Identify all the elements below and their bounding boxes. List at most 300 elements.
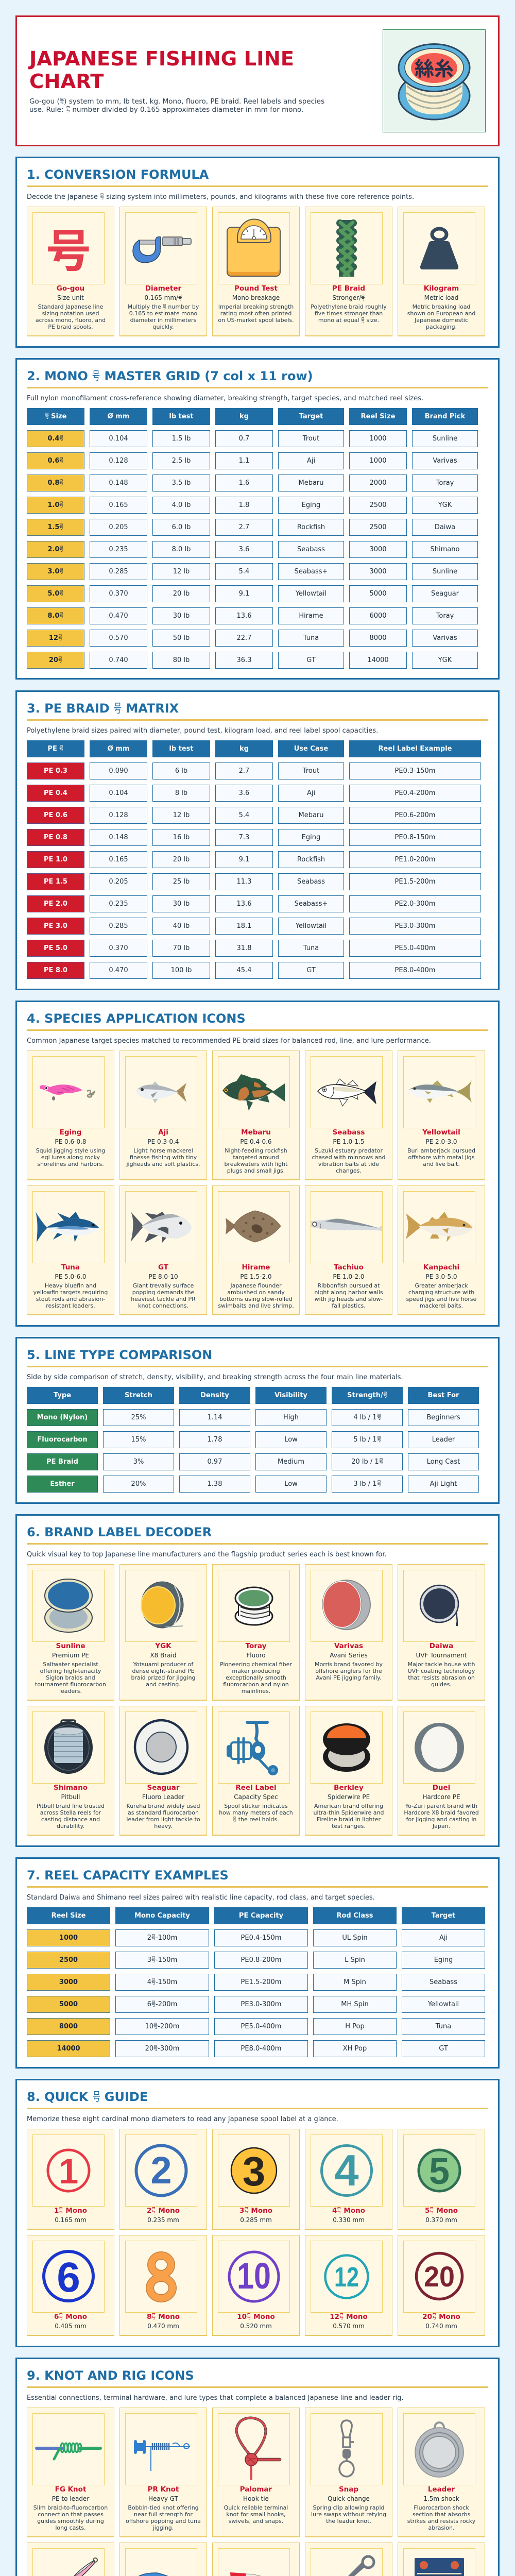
header row: Strength/ — [347, 1392, 383, 1399]
icon: braid — [311, 212, 383, 284]
icon: GT fish — [125, 1191, 197, 1263]
card: Rod Tip — [305, 2543, 392, 2576]
row: PE 0.4: 0.104 — [109, 789, 128, 797]
note: offering high-tenacity — [40, 1668, 101, 1674]
row: PE 0.8 — [27, 829, 481, 846]
heading: 2. MONO MASTER GRID (7 col x 11 row) — [27, 369, 313, 383]
header row: 号 — [383, 1389, 387, 1399]
row: fluorocarbon: 5 lb / 1 — [353, 1436, 377, 1444]
icon: daiwa spool — [403, 1570, 475, 1642]
row: 5000: MH Spin — [341, 2001, 369, 2008]
table: mono grid — [27, 408, 478, 669]
value: PE 1.0-2.0 — [333, 1273, 365, 1280]
note: Squid jigging style using — [36, 1147, 105, 1154]
name: Shimano — [54, 1784, 88, 1792]
icon: metal jig — [32, 2548, 105, 2576]
note: how many meters of each — [219, 1809, 293, 1816]
card: PE Braid — [305, 207, 392, 336]
row: PE 2.0: 30 lb — [173, 900, 190, 908]
icon: micrometer — [125, 212, 197, 284]
note: with jig heads and slow- — [315, 1296, 383, 1302]
icon: number 5: 5 — [429, 2151, 450, 2192]
note — [120, 1147, 207, 1167]
note: Avani PE jigging family. — [316, 1674, 382, 1681]
value: Size unit — [57, 294, 84, 301]
row: 1.5 — [27, 519, 478, 536]
note: exceptionally smooth — [226, 1674, 286, 1681]
card grid — [27, 2408, 485, 2576]
title: CHART — [29, 70, 104, 93]
name: Eging — [60, 1128, 81, 1137]
icon: seabass fish — [311, 1056, 383, 1128]
note — [128, 302, 199, 330]
note: tournament fluorocarbon — [35, 1681, 106, 1688]
row: 14000: PE8.0-400m — [241, 2045, 281, 2053]
note: Morris brand favored by — [315, 1661, 383, 1668]
name — [27, 2207, 114, 2215]
row: PE 0.8: PE0.8-150m — [395, 834, 435, 841]
name — [213, 2207, 299, 2215]
note: stout rods and abrasion- — [36, 1296, 105, 1302]
note — [120, 1661, 207, 1688]
note — [398, 1147, 485, 1167]
icon: ribbonfish — [311, 1191, 383, 1263]
note — [213, 1803, 299, 1823]
note: Polyethylene braid roughly — [311, 303, 387, 310]
row: 3.0: 号 — [59, 566, 64, 575]
card: Mebaru — [212, 1050, 300, 1180]
name: Reel Label — [235, 1784, 277, 1792]
icon: number 1 — [32, 2134, 105, 2207]
row: 0.6: 1000 — [369, 457, 387, 465]
name: 20 Mono — [422, 2313, 460, 2321]
row: PE 0.8: PE 0.8 — [44, 834, 67, 841]
card: Tuna — [27, 1185, 114, 1315]
icon: rod tip guide — [311, 2548, 383, 2576]
note — [305, 1803, 392, 1829]
row: 12: 12 — [49, 634, 58, 642]
heading: 3. PE BRAID MATRIX — [27, 701, 179, 716]
heading: 4. SPECIES APPLICATION ICONS — [27, 1011, 246, 1026]
value: Stronger/ — [332, 294, 361, 301]
row: 3000: PE1.5-200m — [241, 1978, 281, 1986]
value: Avani Series — [330, 1652, 368, 1659]
icon: number 4: 4 — [334, 2146, 359, 2195]
row: 2500: Eging — [434, 1956, 453, 1964]
note: 号 — [361, 316, 365, 324]
heading: 号 — [114, 698, 122, 716]
row: PE 3.0: 0.285 — [109, 922, 128, 930]
row: 20 — [27, 652, 478, 669]
row: 3000: 3000 — [59, 1978, 78, 1986]
value: PE 0.4-0.6 — [240, 1138, 272, 1145]
row: 8000: PE5.0-400m — [241, 2023, 281, 2030]
note: and casting. — [146, 1681, 181, 1688]
row: 8000: 10 -200m — [145, 2023, 179, 2030]
header row: kg — [239, 413, 249, 420]
note: heavy. — [154, 1823, 173, 1829]
row: 20: 80 lb — [173, 656, 190, 664]
row: PE 0.4: 8 lb — [175, 789, 187, 797]
note: plugs and small jigs. — [227, 1167, 285, 1174]
row: 12: 22.7 — [237, 634, 251, 642]
row: fluorocarbon: 1.78 — [208, 1436, 222, 1444]
row: PE braid: 0.97 — [208, 1458, 222, 1466]
row: 12: Tuna — [303, 634, 319, 642]
icon: flounder — [218, 1191, 290, 1263]
row: PE 5.0: PE5.0-400m — [395, 944, 435, 952]
row: 1.5: 6.0 lb — [172, 523, 191, 531]
row: fluorocarbon: Leader — [432, 1436, 455, 1444]
value: 0.470 mm — [147, 2323, 179, 2330]
row: PE 1.5: 0.205 — [109, 878, 128, 886]
note: guides smoothly during — [37, 2518, 104, 2524]
note: connection that passes — [38, 2511, 104, 2518]
row: 14000: 14000 — [57, 2045, 80, 2053]
note: rating most often printed — [220, 310, 291, 317]
row: PE braid: Medium — [278, 1458, 304, 1466]
note: long casts. — [55, 2524, 86, 2531]
row: PE 0.3 — [27, 762, 481, 779]
row: PE 8.0 — [27, 962, 481, 979]
value: 0.165 mm/ — [144, 294, 178, 301]
row: 3.0: 3.0 — [47, 568, 59, 575]
row: PE 3.0: 40 lb — [173, 922, 190, 930]
row: 12: 0.570 — [109, 634, 128, 642]
icon: scale — [218, 212, 290, 284]
header row — [27, 740, 481, 757]
panel: line type comparison — [15, 1337, 500, 1504]
value: Quick change — [328, 2495, 370, 2502]
value: 0.520 mm — [240, 2323, 272, 2330]
row: 1.0: 1.8 — [239, 501, 249, 509]
icon: FG knot — [32, 2413, 105, 2485]
note — [120, 2504, 207, 2531]
card: 2 — [119, 2129, 207, 2230]
note: Kureha brand widely used — [127, 1803, 200, 1809]
row: PE 0.4: Aji — [307, 789, 315, 797]
row: PE 0.6 — [27, 807, 481, 824]
name: 3 Mono — [239, 2207, 272, 2215]
subtitle: 号 — [66, 104, 70, 114]
header row: Stretch — [125, 1392, 152, 1399]
row: 5.0: 号 — [59, 588, 64, 598]
row: 1.5: 1.5 — [47, 523, 59, 531]
name: Daiwa — [430, 1642, 453, 1650]
row: 8.0: 0.470 — [109, 612, 128, 620]
icon: hero spool: 絲糸 — [415, 53, 454, 81]
row: PE 1.5: 25 lb — [173, 878, 190, 886]
intro text: Standard Daiwa and Shimano reel sizes paired with realistic line capacity, rod class, and target species. — [27, 1894, 375, 1902]
row: PE 2.0: 13.6 — [237, 900, 251, 908]
row: 12: Varivas — [433, 634, 457, 642]
row: PE 0.4: 3.6 — [239, 789, 249, 797]
row: 3000: 4 -150m — [147, 1978, 177, 1986]
value: PE 0.3-0.4 — [147, 1138, 179, 1145]
card: Shimano — [27, 1706, 114, 1836]
name: 号 — [432, 2311, 436, 2321]
card: Go-gou — [27, 207, 114, 336]
row: mono: Beginners — [426, 1414, 460, 1421]
note: ultra-thin Spiderwire and — [314, 1809, 384, 1816]
panel: quick guide — [15, 2079, 500, 2347]
row: 5.0: 5.0 — [47, 590, 59, 598]
note: across mono, fluoro, and — [36, 317, 106, 324]
note: guides. — [431, 1681, 452, 1688]
row: 2500 — [27, 1952, 485, 1969]
row: PE braid: 3% — [133, 1458, 144, 1466]
name: 号 — [151, 2311, 156, 2321]
name: 4 Mono — [332, 2207, 365, 2215]
note: changes. — [336, 1167, 362, 1174]
value: 号 — [178, 293, 182, 302]
row: esther: Esther — [50, 1480, 75, 1488]
name: 号 — [151, 2205, 156, 2215]
row: 3.0: 3000 — [369, 568, 387, 575]
row: 0.8: 0.148 — [109, 479, 128, 487]
name: 5 Mono — [425, 2207, 458, 2215]
heading: 9. KNOT AND RIG ICONS — [27, 2368, 194, 2383]
row: 1.5: Rockfish — [297, 523, 325, 531]
row: mono: 号 — [377, 1412, 381, 1421]
title: JAPANESE FISHING LINE — [29, 47, 294, 71]
row: 0.4: Sunline — [433, 435, 457, 443]
value: 0.370 mm — [425, 2216, 457, 2224]
row: PE 0.3: PE0.3-150m — [395, 767, 435, 775]
header row: lb test — [169, 413, 194, 420]
note: for jigging and casting in — [406, 1816, 476, 1823]
panel: mono master grid — [15, 358, 500, 680]
icon: minnow lure — [125, 2548, 197, 2576]
value: PE 5.0-6.0 — [55, 1273, 87, 1280]
row: 14000: 号 — [153, 2043, 158, 2053]
header row: Best For — [428, 1392, 459, 1399]
title — [28, 47, 294, 93]
row: mono: 25% — [131, 1414, 146, 1421]
name: Yellowtail — [422, 1128, 460, 1137]
row: 5.0: 9.1 — [239, 590, 249, 598]
row: PE 1.0: PE1.0-200m — [395, 856, 435, 863]
note: abrasion. — [428, 2524, 454, 2531]
header row: lb test — [169, 745, 194, 753]
note: ambushed on sandy — [227, 1289, 285, 1296]
name: 号 — [59, 2205, 63, 2215]
note: Imperial breaking strength — [218, 303, 294, 310]
row: 1000: 1000 — [59, 1934, 78, 1942]
note: Quick reliable terminal — [224, 2504, 288, 2511]
row: 20: 号 — [58, 654, 62, 664]
icon: number 5 — [403, 2134, 475, 2207]
name — [398, 2313, 485, 2321]
row: 12 — [27, 630, 478, 647]
icon: popper lure — [218, 2548, 290, 2576]
name: PE Braid — [332, 284, 365, 293]
name: 号 — [337, 2205, 341, 2215]
name: 2 Mono — [147, 2207, 180, 2215]
row: 1000: 号 — [151, 1932, 156, 1942]
note: knot for small hooks, — [226, 2511, 286, 2518]
card: 3 — [212, 2129, 300, 2230]
icon: number 8 — [125, 2241, 197, 2313]
note: Night-feeding rockfish — [225, 1147, 287, 1154]
icon: palomar knot — [218, 2413, 290, 2485]
row: 20: 36.3 — [237, 656, 251, 664]
header row — [27, 408, 478, 425]
row: PE 5.0: PE 5.0 — [44, 944, 67, 952]
note — [36, 303, 106, 330]
icon: number 3: 3 — [243, 2148, 265, 2194]
icon: weight — [403, 212, 475, 284]
row: PE 8.0: 45.4 — [237, 967, 251, 974]
row: mono: 4 lb / 1 — [353, 1414, 377, 1421]
row: 5000: 号 — [151, 1998, 156, 2008]
note: shown on European and — [407, 310, 475, 317]
card: 1 — [27, 2129, 114, 2230]
row: 2500: L Spin — [345, 1956, 365, 1964]
row: 0.4: Trout — [303, 435, 319, 443]
row: 12: 号 — [58, 632, 62, 642]
card: Seabass — [305, 1050, 392, 1180]
icon: spool box — [403, 2548, 475, 2576]
row: 0.4 — [27, 430, 478, 447]
name: Berkley — [334, 1784, 364, 1792]
row: 20: GT — [306, 656, 316, 664]
row: 2.0: 8.0 lb — [172, 546, 191, 553]
row: 1.5: Daiwa — [435, 523, 455, 531]
row: 2500: 号 — [151, 1954, 156, 1964]
name: 号 — [247, 2311, 251, 2321]
note — [311, 303, 387, 324]
note: Standard Japanese line — [38, 303, 103, 310]
card: Palomar — [212, 2408, 300, 2537]
note: Bobbin-tied knot offering — [128, 2504, 199, 2511]
note: vibration baits at tide — [318, 1161, 379, 1167]
note — [120, 1282, 207, 1309]
card: Eging — [27, 1050, 114, 1180]
icon: sunline spool — [32, 1570, 105, 1642]
note: fluorocarbon and nylon — [223, 1681, 289, 1688]
icon: kanpachi fish — [403, 1191, 475, 1263]
header row: Reel Size — [52, 1912, 85, 1920]
note: swimbaits and live shrimp. — [218, 1302, 294, 1309]
card: 10 — [212, 2235, 300, 2336]
heading: 6. BRAND LABEL DECODER — [27, 1525, 212, 1539]
note: Pitbull braid line trusted — [37, 1803, 105, 1809]
table: reel capacity — [27, 1907, 485, 2057]
row: 8000: Tuna — [436, 2023, 451, 2030]
row: PE 0.6: PE0.6-200m — [395, 811, 435, 819]
header row: PE Capacity — [239, 1912, 283, 1920]
note: popping demands the — [132, 1289, 194, 1296]
name: Seaguar — [147, 1784, 180, 1792]
name: Seabass — [333, 1128, 365, 1137]
icon: squid jig — [32, 1056, 105, 1128]
row: PE 1.0: 9.1 — [239, 856, 249, 863]
header row: Ø mm — [108, 413, 129, 420]
note: as standard fluorocarbon — [128, 1809, 199, 1816]
name: 号 — [430, 2205, 434, 2215]
note: dense eight-strand PE — [132, 1668, 195, 1674]
row: 0.4: 0.7 — [239, 435, 249, 443]
note: Yo-Zuri parent brand with — [405, 1803, 477, 1809]
value: Capacity Spec — [234, 1793, 278, 1801]
row: 14000: XH Pop — [343, 2045, 367, 2053]
card: Hirame — [212, 1185, 300, 1315]
card: Varivas — [305, 1564, 392, 1701]
table: line types — [27, 1387, 479, 1493]
card: 8 — [119, 2235, 207, 2336]
note: on US-market spool labels. — [218, 317, 294, 324]
row: 0.4: 0.4 — [47, 435, 59, 443]
row: PE 0.4 — [27, 785, 481, 802]
card: Duel — [398, 1706, 485, 1836]
row: 20: YGK — [438, 656, 452, 664]
row: PE 5.0: 70 lb — [173, 944, 190, 952]
name: Snap — [339, 2485, 358, 2494]
row: 5.0 — [27, 585, 478, 602]
icon: number 2 — [125, 2134, 197, 2207]
icon: shimano spool — [32, 1711, 105, 1784]
row: 12: 50 lb — [173, 634, 190, 642]
note: swivels, and snaps. — [229, 2518, 283, 2524]
card: Leader — [398, 2408, 485, 2537]
note: strikes and resists rocky — [407, 2518, 475, 2524]
note: Metric breaking load — [413, 303, 470, 310]
name — [120, 2207, 207, 2215]
row: PE 1.0: PE 1.0 — [44, 856, 67, 863]
row: 3000: 号 — [151, 1976, 156, 1986]
name: 10 Mono — [237, 2313, 275, 2321]
note: leaders. — [59, 1688, 82, 1694]
note: Saltwater specialist — [43, 1661, 98, 1668]
note: Yotsuami producer of — [133, 1661, 193, 1668]
note: resistant leaders. — [46, 1302, 95, 1309]
name: FG Knot — [55, 2485, 86, 2494]
row: 1.0: Eging — [302, 501, 320, 509]
row: fluorocarbon: 15% — [131, 1436, 146, 1444]
header row: Use Case — [294, 745, 328, 753]
row: PE 1.5: 11.3 — [237, 878, 251, 886]
row: 0.6: Aji — [307, 457, 315, 465]
row: 8000 — [27, 2018, 485, 2035]
note: near full strength for — [134, 2511, 193, 2518]
note — [305, 1147, 392, 1174]
row: 5.0: Seaguar — [431, 590, 459, 598]
note: night along harbor walls — [314, 1289, 383, 1296]
row: 5.0: 20 lb — [173, 590, 190, 598]
row: 8000: H Pop — [345, 2023, 365, 2030]
name: Leader — [428, 2485, 455, 2494]
row: 1000: UL Spin — [342, 1934, 368, 1942]
note: PE braid spools. — [48, 324, 93, 330]
row: 1.5: 号 — [59, 521, 64, 531]
card: Sunline — [27, 1564, 114, 1701]
intro text: Decode the Japanese sizing system into millimeters, pounds, and kilograms with these five core reference points. — [27, 193, 414, 201]
note: that resists abrasion on — [408, 1674, 475, 1681]
row: 3.0: 12 lb — [173, 568, 190, 575]
row: 8.0: 13.6 — [237, 612, 251, 620]
card: GT — [119, 1185, 207, 1315]
name: Tuna — [61, 1263, 80, 1272]
panel: conversion formula — [15, 157, 500, 348]
row: PE 0.3: 2.7 — [239, 767, 249, 775]
row: 1.5: 2.7 — [239, 523, 249, 531]
header row: Target — [432, 1912, 455, 1920]
row: PE 0.3: 0.090 — [109, 767, 128, 775]
note: Ribbonfish pursued at — [317, 1282, 380, 1289]
row: 2.0: Shimano — [431, 546, 459, 553]
icon: number 1: 1 — [59, 2151, 78, 2191]
